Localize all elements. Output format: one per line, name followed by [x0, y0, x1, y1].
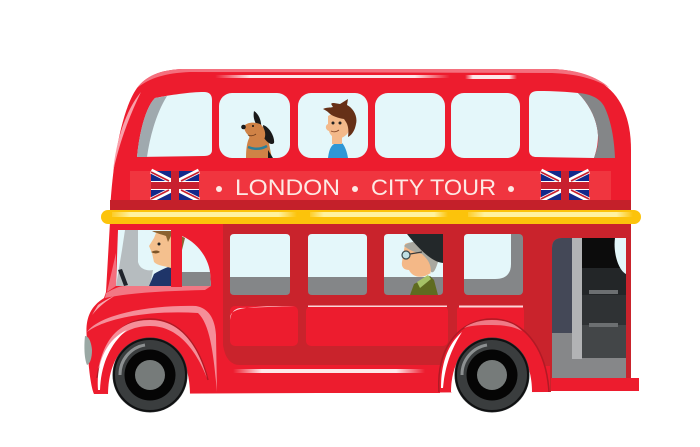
upper deck body: [110, 69, 631, 212]
door opening with stairs: [552, 238, 626, 378]
yellow roof rail: [101, 200, 641, 224]
lower windows: [230, 234, 523, 295]
driver's cab window with driver: [105, 224, 211, 298]
boy in window: [323, 99, 356, 158]
text: LONDON: LONDON: [235, 175, 340, 200]
lady in window: [402, 234, 443, 295]
flag right: [541, 171, 589, 200]
front wheel: [97, 319, 208, 414]
upper windows: [137, 91, 615, 158]
lower deck body: [86, 222, 639, 394]
driver: [149, 231, 185, 286]
dog in window: [241, 111, 274, 158]
text: CITY TOUR: CITY TOUR: [371, 175, 496, 200]
rear wheel: [439, 319, 549, 414]
banner: London City Tour: [130, 171, 611, 200]
front hood shadow and headlight: [84, 336, 92, 365]
flag left: [151, 171, 199, 200]
